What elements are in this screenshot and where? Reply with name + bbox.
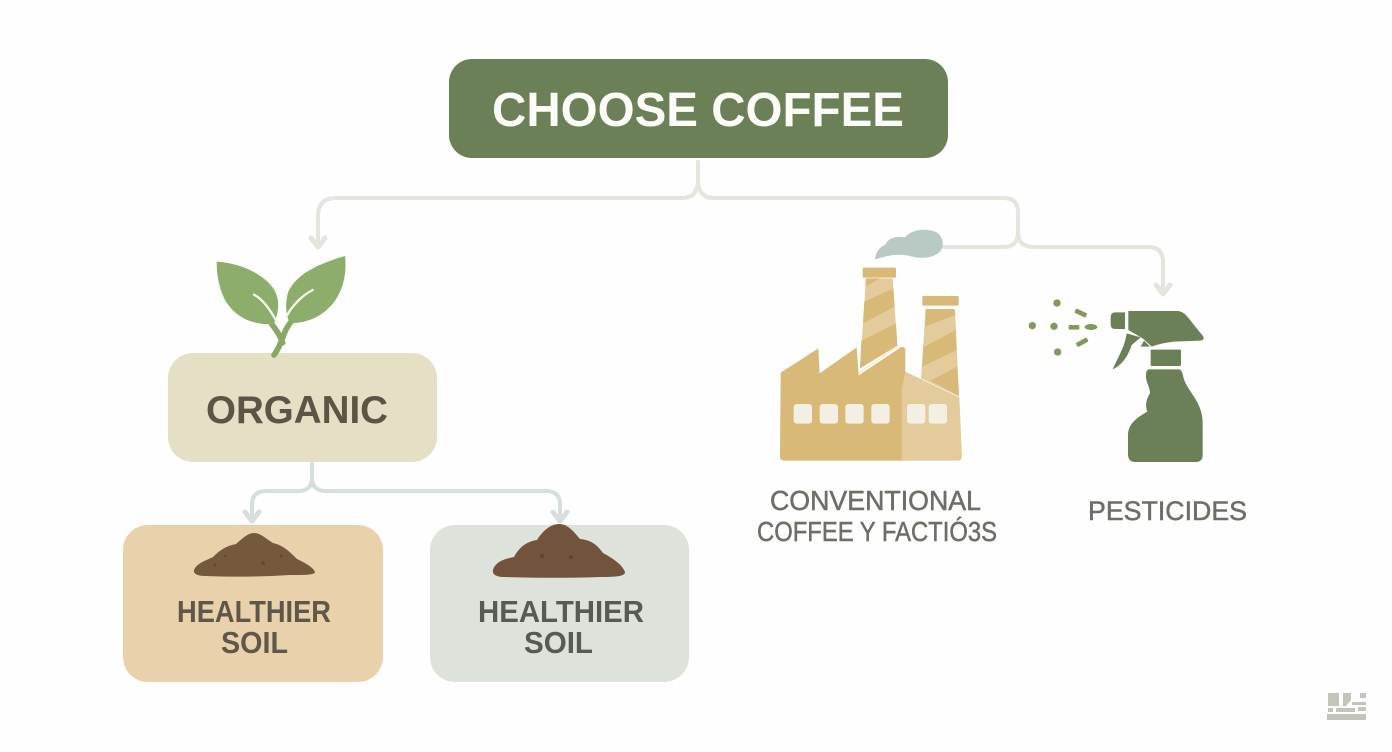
arrow: title to pesticides, with branch to factory smoke: [698, 162, 1170, 294]
icon: spray bottle: [1029, 299, 1204, 462]
panel: organic: [168, 353, 437, 462]
icon: factory with smoke: [780, 230, 962, 461]
icon: soil mound, tan panel: [194, 533, 315, 577]
label: pesticides: PESTICIDES: [1088, 496, 1247, 526]
icon: watermark: [1327, 693, 1366, 720]
title box: CHOOSE COFFEE: [492, 84, 904, 137]
title box: [449, 59, 948, 158]
panel: healthier soil, grey: [430, 524, 689, 682]
label: conventional coffee: CONVENTIONAL: [770, 485, 981, 516]
label: conventional coffee: COFFEE Y FACTIÓ3S: [757, 516, 997, 547]
panel: healthier soil, tan: [123, 525, 383, 682]
text: healthier soil, tan panel: SOIL: [221, 625, 288, 660]
icon: soil mound, grey panel: [493, 524, 625, 578]
text: healthier soil, grey panel: HEALTHIER: [478, 594, 644, 629]
label: conventional coffee: [757, 485, 997, 547]
text: healthier soil, grey panel: SOIL: [524, 625, 593, 660]
icon: green sprout: [217, 256, 346, 355]
text: healthier soil, tan panel: HEALTHIER: [177, 594, 331, 629]
arrows: organic to soil panels: [245, 464, 567, 521]
panel: organic: ORGANIC: [206, 389, 388, 432]
arrow: title to organic: [311, 162, 698, 247]
